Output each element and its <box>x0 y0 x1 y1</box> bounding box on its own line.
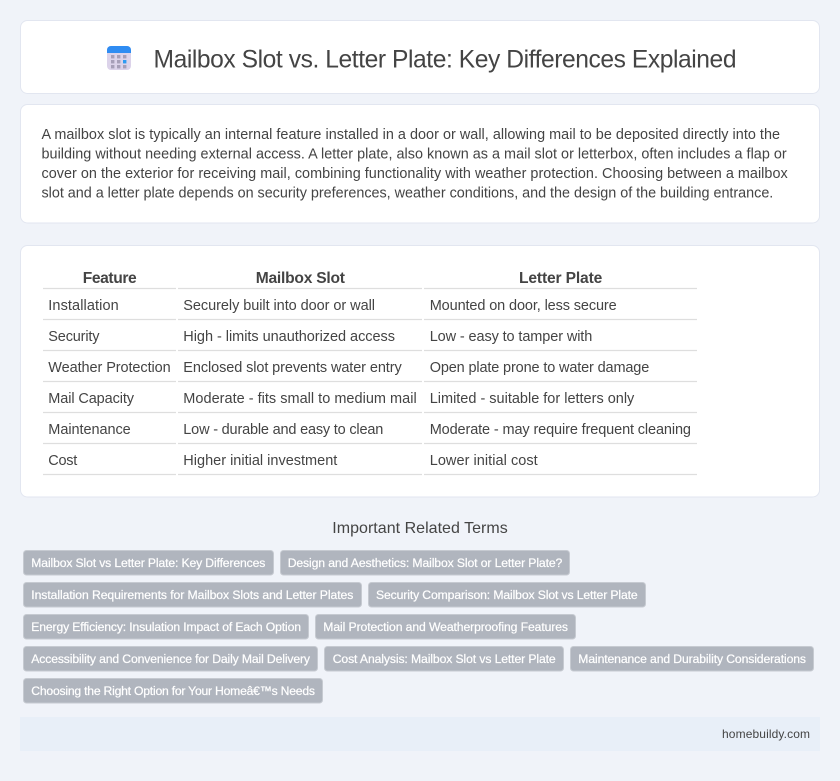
icon: calendar <box>107 46 131 70</box>
row: maintenance <box>48 422 691 438</box>
tag: Maintenance and Durability Considerations <box>578 652 806 666</box>
text block: intro paragraph <box>42 127 788 202</box>
text block: intro paragraph: cover on the exterior for receiving mail, combining functionality with weather protection. Choosing between a mailbox <box>42 166 788 182</box>
tag: Mailbox Slot vs Letter Plate: Key Differences <box>31 556 265 570</box>
row: mail capacity: Limited - suitable for letters only <box>430 391 635 407</box>
tag: Energy Efficiency: Insulation Impact of Each Option <box>31 620 301 634</box>
tag: Cost Analysis: Mailbox Slot vs Letter Plate <box>333 652 556 666</box>
footer: homebuildy.com <box>722 727 810 741</box>
panel: comparison table <box>20 246 820 497</box>
tags: related terms <box>24 550 814 703</box>
tag <box>280 550 570 575</box>
tag <box>368 582 646 607</box>
table header row: Mailbox Slot <box>256 270 345 287</box>
table header row: Letter Plate <box>519 270 603 287</box>
row: mail capacity: Mail Capacity <box>48 391 135 407</box>
row: cost: Cost <box>48 453 77 469</box>
tag: Mail Protection and Weatherproofing Features <box>323 620 568 634</box>
title: Mailbox Slot vs. Letter Plate: Key Differences Explained <box>154 46 736 74</box>
tag <box>24 646 318 671</box>
tag <box>24 678 322 703</box>
row: weather protection: Weather Protection <box>48 360 171 376</box>
row: security <box>48 329 592 345</box>
row: maintenance: Maintenance <box>48 422 131 438</box>
tag <box>24 582 362 607</box>
row: maintenance: Low - durable and easy to clean <box>183 422 383 438</box>
tag: Accessibility and Convenience for Daily Mail Delivery <box>31 652 311 666</box>
row: cost <box>48 453 538 469</box>
row: security: Low - easy to tamper with <box>430 329 592 345</box>
row: installation: Securely built into door or wall <box>183 298 375 314</box>
tag <box>316 614 576 639</box>
tag: Installation Requirements for Mailbox Slots and Letter Plates <box>31 588 353 602</box>
row: security: Security <box>48 329 100 345</box>
row: weather protection <box>48 360 649 376</box>
text block: intro paragraph: slot and a letter plate depends on security preferences, weather conditions, and the design of the building entrance. <box>42 186 773 202</box>
panel: header <box>20 20 820 94</box>
heading: important related terms: Important Related Terms <box>332 520 508 537</box>
table header row: Feature <box>83 270 137 287</box>
footer <box>20 717 820 751</box>
row: maintenance: Moderate - may require frequent cleaning <box>430 422 691 438</box>
tag <box>24 614 308 639</box>
text block: intro paragraph: A mailbox slot is typically an internal feature installed in a door or wall, allowing mail to be deposited directly into the <box>42 127 780 143</box>
row: security: High - limits unauthorized access <box>183 329 395 345</box>
tag <box>570 646 814 671</box>
panel: intro text <box>20 104 820 223</box>
table header row <box>83 270 603 287</box>
tag: Design and Aesthetics: Mailbox Slot or Letter Plate? <box>288 556 563 570</box>
text block: intro paragraph: building without needing external access. A letter plate, also known as a mail slot or letterbox, often includes a flap or <box>42 146 787 162</box>
row: weather protection: Enclosed slot prevents water entry <box>183 360 402 376</box>
row: cost: Lower initial cost <box>430 453 538 469</box>
row: weather protection: Open plate prone to water damage <box>430 360 649 376</box>
row: installation: Mounted on door, less secure <box>430 298 617 314</box>
row: mail capacity: Moderate - fits small to medium mail <box>183 391 417 407</box>
tag <box>24 550 274 575</box>
tag: Security Comparison: Mailbox Slot vs Letter Plate <box>376 588 638 602</box>
tag: Choosing the Right Option for Your Homeâ€™s Needs <box>31 684 315 698</box>
tag <box>324 646 564 671</box>
row: mail capacity <box>48 391 635 407</box>
row: cost: Higher initial investment <box>183 453 337 469</box>
row: installation: Installation <box>48 298 119 314</box>
row: installation <box>48 298 617 314</box>
